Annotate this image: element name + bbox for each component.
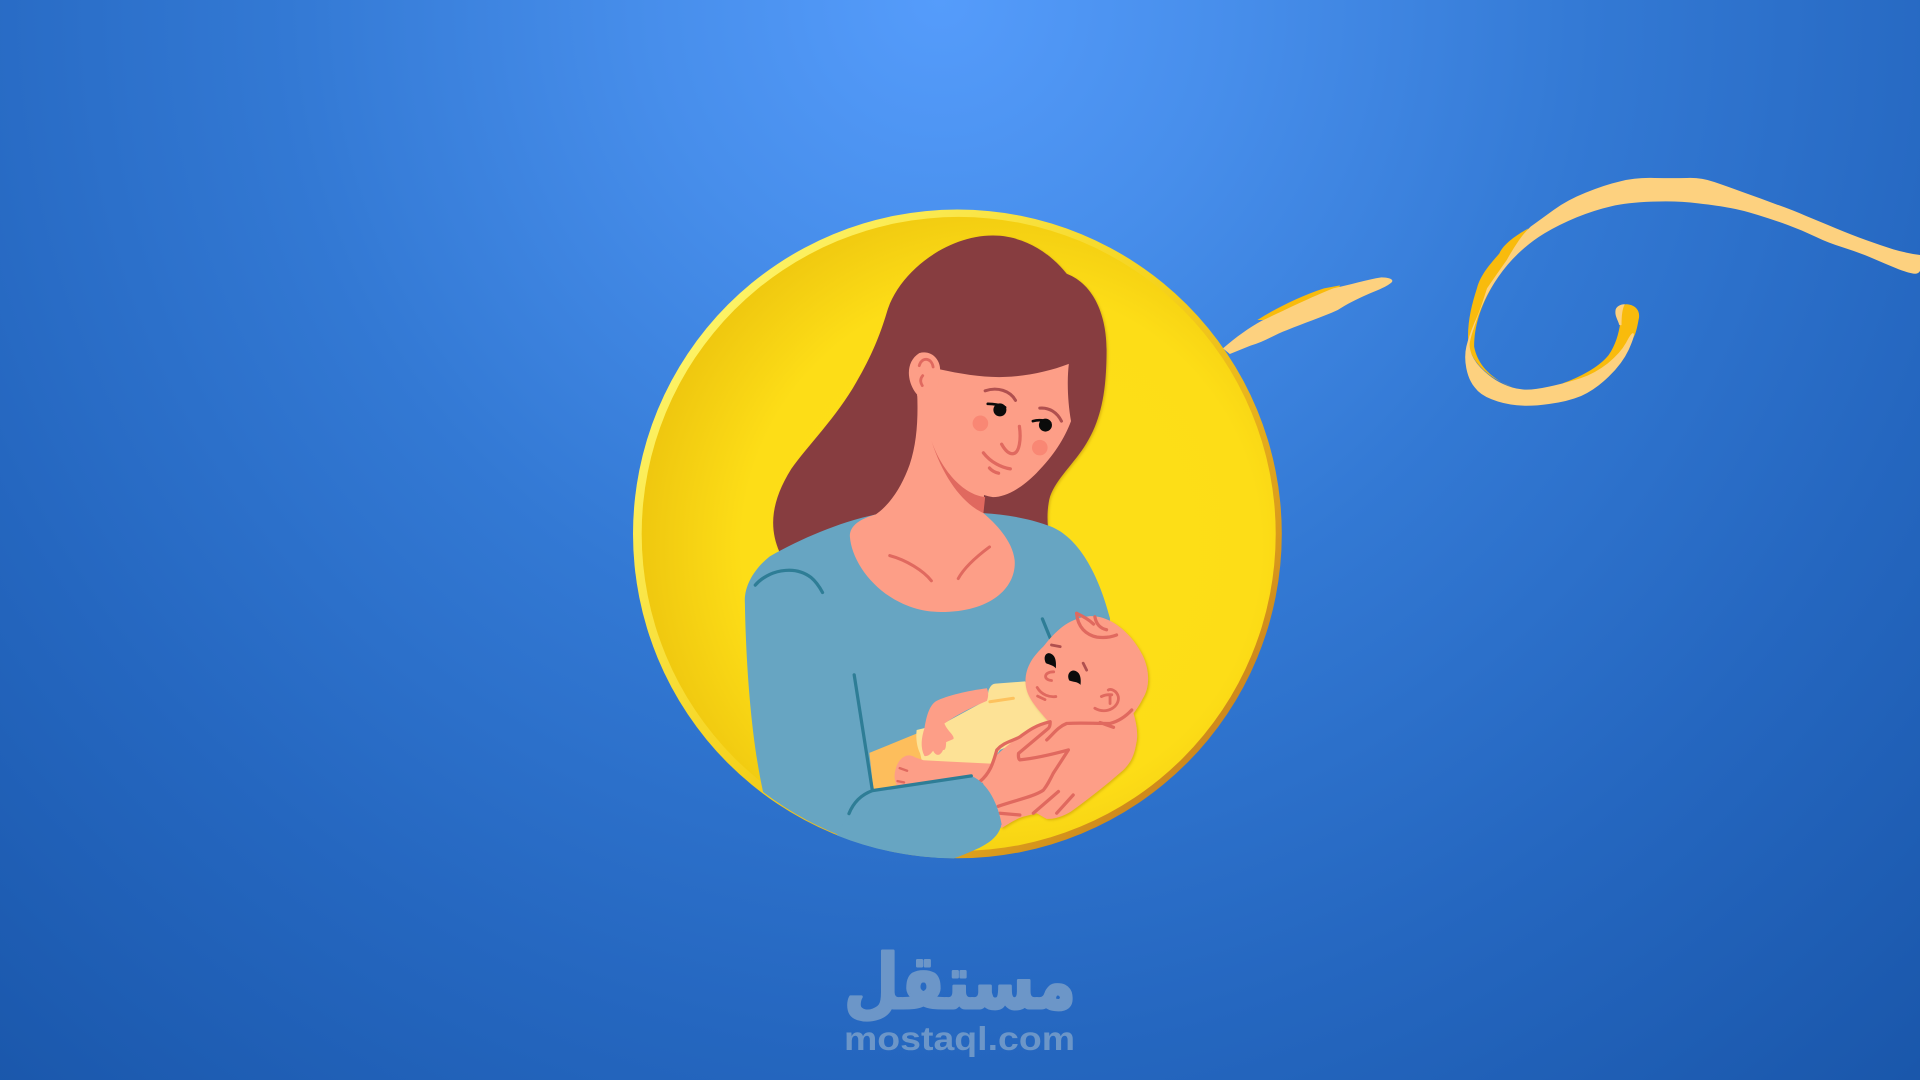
mother: shoulder seam xyxy=(755,570,823,592)
ribbon: short streak xyxy=(1223,277,1392,354)
mother: shirt xyxy=(745,513,1110,858)
mother: hand outlines xyxy=(980,710,1132,815)
ribbon: long curl xyxy=(1465,178,1920,406)
logo: arabic wordmark: مستقل xyxy=(844,938,1076,1026)
mother: eyes xyxy=(988,403,1052,432)
mother: collarbone lines xyxy=(890,547,989,581)
mother: cheeks xyxy=(973,416,1048,455)
mother: chest line xyxy=(1042,619,1050,638)
baby: ear xyxy=(1095,689,1118,711)
baby: eyes and brows xyxy=(1045,645,1087,685)
baby: arm and hand xyxy=(922,688,988,756)
mother: eyebrows xyxy=(985,389,1061,421)
logo: latin wordmark: mostaql.com xyxy=(844,1020,1075,1057)
yellow circle with mother and baby xyxy=(633,210,1282,858)
mother: chin shadow xyxy=(931,441,985,513)
circle: rim and disc xyxy=(633,210,1282,858)
baby: nose and mouth xyxy=(1037,672,1056,700)
mother: arm and cuff lines xyxy=(849,675,971,814)
mother: face xyxy=(917,364,1071,497)
baby: head and mother's supporting hand xyxy=(982,616,1148,828)
baby: hair curls xyxy=(1077,613,1117,637)
baby: leg and foot xyxy=(895,755,993,786)
mother: ear xyxy=(909,352,940,396)
mother: sleeve xyxy=(837,776,1002,858)
mother: nose and mouth xyxy=(983,426,1020,473)
logo watermark xyxy=(844,938,1076,1057)
baby: trousers xyxy=(869,733,924,792)
baby: body suit xyxy=(916,681,1058,768)
mother: hair xyxy=(773,236,1107,552)
mother: neck and chest xyxy=(850,391,1015,612)
